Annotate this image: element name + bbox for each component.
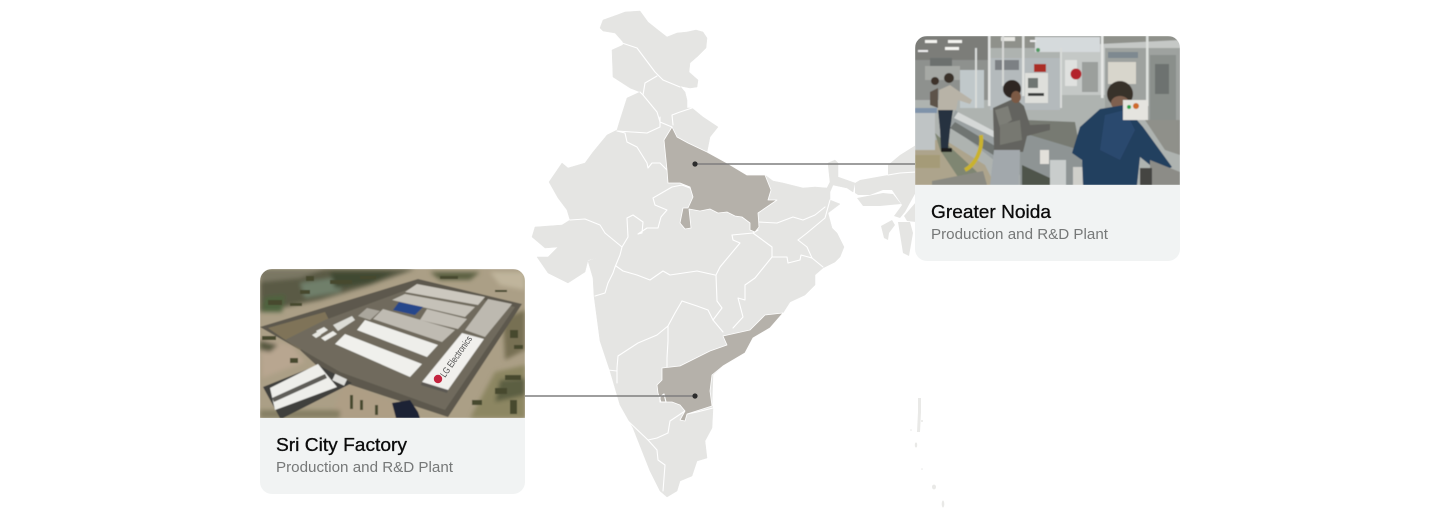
connector: Greater Noida xyxy=(692,161,916,167)
yellow hose xyxy=(965,135,981,170)
button box xyxy=(1123,100,1148,120)
highlighted state: Uttar Pradesh xyxy=(664,127,777,232)
lake xyxy=(392,400,420,418)
mainland silhouette xyxy=(532,11,855,497)
heading: Sri City Factory xyxy=(276,434,408,455)
card background xyxy=(915,36,1180,261)
LG building sign: LG Electronics xyxy=(438,334,475,380)
connector: Sri City xyxy=(524,393,698,399)
highlighted state: Andhra Pradesh xyxy=(657,313,783,421)
white roofs xyxy=(357,320,438,357)
worker in plaid shirt xyxy=(993,98,1050,152)
lower-left building xyxy=(263,365,352,418)
Arunachal Pradesh and Assam xyxy=(855,145,916,218)
photo: factory line workers xyxy=(915,36,1180,185)
back rows of machines xyxy=(915,60,990,100)
Meghalaya xyxy=(857,193,901,206)
control panel xyxy=(1025,73,1048,103)
photo: aerial factory render xyxy=(260,269,525,418)
heading: Greater Noida xyxy=(931,201,1052,222)
site base xyxy=(260,279,522,417)
card: Sri City Factory xyxy=(260,269,525,494)
right side machinery xyxy=(1145,120,1180,155)
Arunachal border xyxy=(888,172,916,175)
LG building xyxy=(422,333,484,390)
surrounding land xyxy=(260,269,525,418)
subtitle: Production and R&D Plant xyxy=(276,459,454,476)
subtitle: Production and R&D Plant xyxy=(931,226,1109,243)
card: Greater Noida xyxy=(915,36,1180,261)
state borders xyxy=(570,43,830,491)
Andaman and Nicobar islands xyxy=(910,398,944,508)
map of India xyxy=(532,11,944,508)
worker in blue jacket xyxy=(1107,81,1133,107)
LG logo xyxy=(434,375,442,383)
red equipment xyxy=(1034,64,1046,72)
conveyor xyxy=(950,110,1020,174)
card background xyxy=(260,269,525,494)
floor xyxy=(915,140,995,185)
Mizoram xyxy=(898,222,913,256)
grey roofs xyxy=(405,284,485,305)
Karnataka enclave border xyxy=(660,394,666,402)
Tripura xyxy=(881,220,895,240)
worker in white tee xyxy=(938,85,972,110)
Nagaland and Manipur xyxy=(904,202,916,222)
land speckles xyxy=(262,276,523,415)
small buildings xyxy=(316,327,328,335)
